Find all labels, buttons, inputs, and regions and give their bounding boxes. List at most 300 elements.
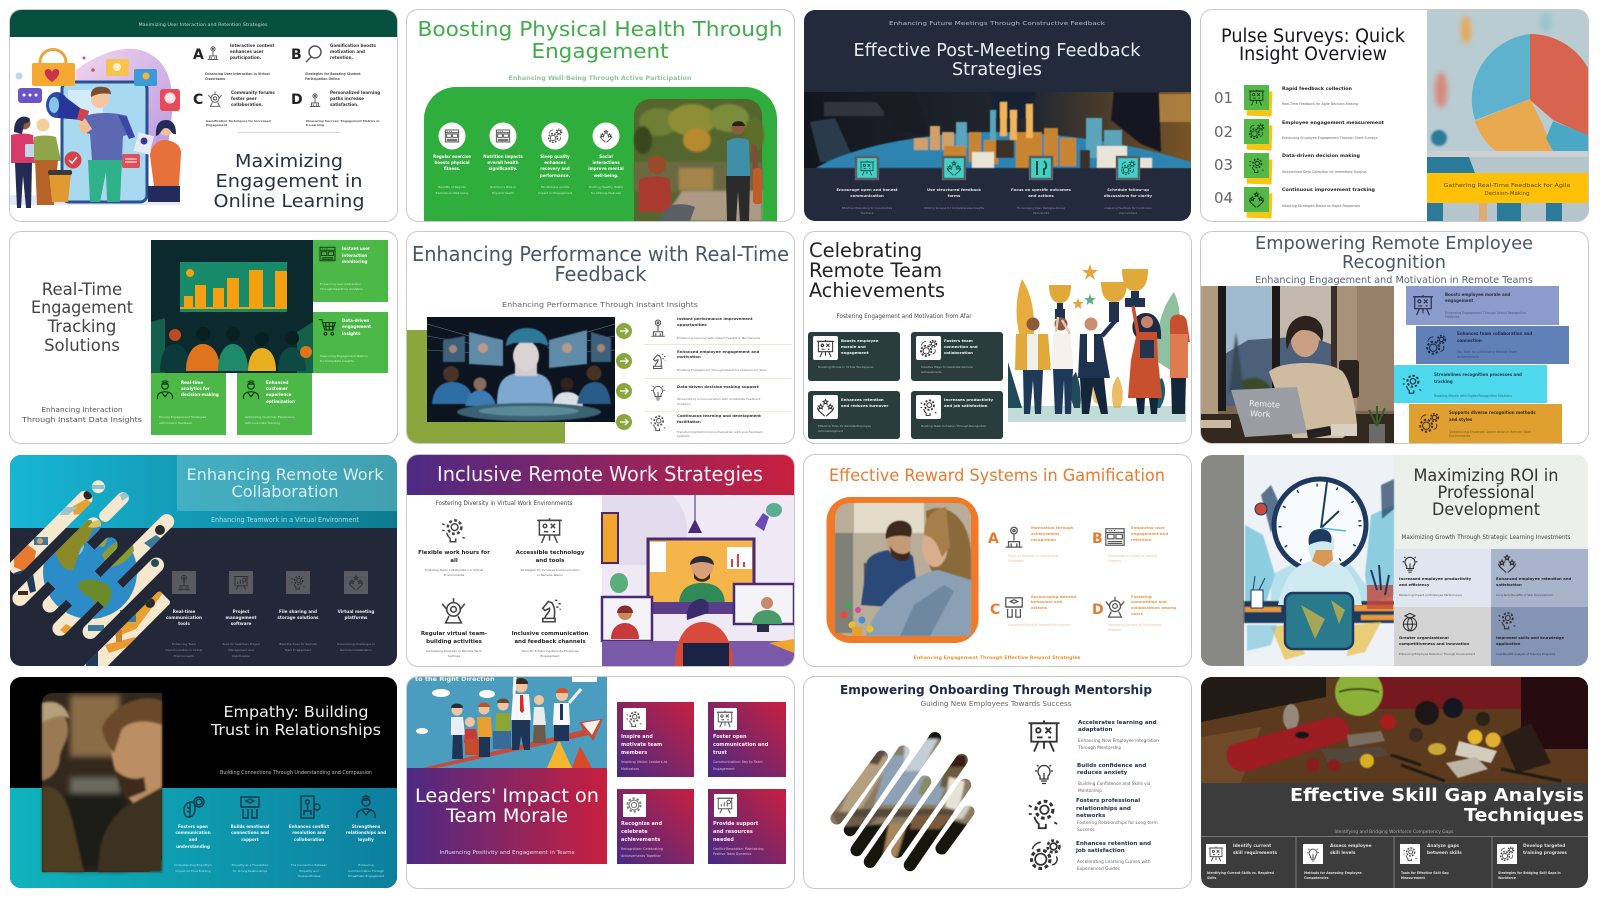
- item texts: relationships and: [346, 830, 386, 835]
- title: [31, 280, 134, 355]
- item texts: fitness.: [444, 166, 461, 171]
- feedback icon tiles: [856, 157, 1139, 179]
- title: Empathy: Building: [224, 703, 368, 721]
- tool labels: software: [231, 621, 252, 626]
- tool labels: platforms: [345, 615, 368, 620]
- title: Solutions: [44, 336, 120, 355]
- item A: recognition: [1031, 537, 1056, 542]
- title: Real-Time: [42, 280, 122, 299]
- tile: recognize: Achievements Together: [621, 854, 661, 858]
- card: Maximizing Engagement in Online Learning: [10, 10, 397, 221]
- step text: Rapid feedback collection: [1282, 86, 1352, 92]
- item captions: for Lifelong Wellness: [591, 191, 621, 195]
- tile captions: [1399, 593, 1556, 656]
- card: Celebrating Remote Team Achievements: [804, 232, 1191, 443]
- item C: C: [193, 92, 203, 108]
- title: [1221, 26, 1405, 65]
- item D: Measuring Success: Engagement Metrics in: [306, 119, 380, 123]
- item texts: Builds emotional: [231, 824, 270, 829]
- item A: A: [988, 531, 999, 547]
- item B: retention: [1131, 537, 1152, 542]
- item texts: Sleep quality: [540, 154, 570, 159]
- item captions: Building Confidence and Skills via: [1078, 781, 1151, 787]
- card: Real-Time Engagement Tracking Solutions: [10, 232, 397, 443]
- card: Pulse Surveys: Quick Insight Overview: [1201, 10, 1588, 221]
- tool labels: [166, 609, 374, 626]
- tool captions: Tools for Seamless Project: [221, 642, 261, 646]
- olive block: [407, 330, 565, 443]
- tile captions: Cost-Benefit Analysis of Training Programs: [1496, 652, 1556, 656]
- card captions: Acknowledgment: [818, 429, 844, 433]
- green box: customer experience: Optimizing Customer Experience: [245, 415, 295, 419]
- item texts: facilitation: [677, 419, 701, 424]
- title: [809, 239, 945, 302]
- green box: customer experience: with Live Data Tracking: [245, 421, 280, 425]
- card: Effective Reward Systems in Gamification: [804, 455, 1191, 666]
- subtitle: Fostering Diversity in Virtual Work Environments: [436, 500, 572, 507]
- item texts: relationships and: [1076, 806, 1131, 812]
- caption banner: [1427, 173, 1588, 203]
- column texts: [1233, 843, 1567, 856]
- item texts: Enhanced employee engagement and: [677, 349, 760, 354]
- item texts: resolution and: [292, 830, 326, 835]
- tile: recognize: [617, 789, 694, 864]
- item texts: overall health: [487, 160, 519, 165]
- icons row: [438, 122, 620, 150]
- green box: instant monitoring: Through Real-Time Analytics: [319, 287, 363, 291]
- tile: support: Conflict Resolution: Maintaining: [713, 847, 764, 851]
- item captions: Addressing Diversity in Remote Work: [426, 649, 482, 653]
- item texts: forms: [948, 193, 961, 198]
- title: [210, 703, 381, 739]
- item captions: [676, 336, 767, 438]
- item captions: Empathy as a Foundation: [232, 863, 269, 867]
- step captions: Real-Time Feedback for Agile Decision-Making: [1282, 102, 1358, 106]
- subtitle: Enhancing Engagement and Motivation in Remote Teams: [1255, 275, 1533, 286]
- item B: engagement and: [1131, 531, 1168, 536]
- item texts: Instant performance improvement: [677, 316, 753, 321]
- item B: retention.: [330, 55, 354, 60]
- item texts: boosts physical: [435, 160, 470, 165]
- title: Strategies: [952, 59, 1042, 80]
- item texts: Fosters professional: [1076, 798, 1140, 804]
- card captions: Building Team Cohesion Through Recognition: [921, 424, 987, 428]
- tool captions: Environments: [174, 654, 194, 658]
- tool tiles: [172, 571, 368, 594]
- card: Enhancing Remote Work Collaboration: [10, 455, 397, 666]
- column captions: Tools for Effective Skill Gap: [1401, 871, 1449, 875]
- tool labels: tools: [178, 621, 190, 626]
- item captions: Building Healthy Habits: [589, 185, 623, 189]
- benefit tiles: [1394, 549, 1588, 666]
- stepped box 1: Boosts employee morale and: [1445, 292, 1511, 297]
- item captions: Utilizing Surveys for Comprehensive Insights: [924, 206, 985, 210]
- tool captions: Communication in Virtual: [166, 648, 203, 652]
- title: Professional: [1438, 483, 1534, 502]
- arrow buttons: [616, 323, 632, 430]
- item texts: and tools: [536, 558, 565, 564]
- bottom caption: Enhancing Engagement Through Effective Reward Strategies: [914, 655, 1081, 661]
- item A: [988, 525, 1074, 563]
- column texts: skill requirements: [1233, 850, 1278, 856]
- item B: motivation and: [330, 49, 365, 54]
- tile: communication: Engagement: [713, 767, 735, 771]
- item texts: Social: [599, 154, 613, 159]
- item texts: building activities: [426, 639, 483, 645]
- green box: customer experience: Enhanced: [266, 380, 289, 385]
- title: [1255, 233, 1533, 273]
- stepped box 4: and styles: [1449, 417, 1473, 422]
- tile: support: [708, 789, 786, 864]
- card: Boosting Physical Health Through Engagement: [407, 10, 794, 221]
- column texts: training programs: [1523, 850, 1567, 856]
- item captions: Analyzing Feedback for Continuous: [1104, 206, 1152, 210]
- column captions: [1207, 871, 1561, 880]
- column texts: skill levels: [1330, 850, 1356, 856]
- dividers: [644, 344, 792, 412]
- tile texts: competitiveness and innovation: [1399, 641, 1470, 646]
- card: Inclusive Remote Work Strategies: [407, 455, 794, 666]
- card texts: collaboration: [944, 350, 973, 355]
- subtitle: Building Connections Through Understanding and Compassion: [220, 770, 372, 776]
- green box: customer experience: experience: [266, 392, 292, 397]
- card texts: engagement: [841, 350, 869, 355]
- item B: [291, 43, 376, 81]
- item captions: Through Mentorship: [1077, 745, 1121, 751]
- item A: A: [193, 47, 204, 63]
- item texts: Regular exercise: [433, 154, 471, 159]
- title: Maximizing ROI in: [1414, 466, 1558, 485]
- subtitle: [21, 405, 142, 424]
- title: Effective Post-Meeting Feedback: [854, 40, 1141, 61]
- item texts: enhances: [544, 160, 566, 165]
- step captions: Enhancing Employee Engagement Through Short Surveys: [1282, 136, 1378, 140]
- item captions: in Remote Teams: [537, 573, 563, 577]
- item captions: Systems: [677, 434, 690, 438]
- column icons: [1206, 844, 1517, 864]
- card texts: connection and: [944, 344, 978, 349]
- item texts: [175, 824, 386, 849]
- stepped box 3: Boosting Morale with Digital Recognition Solutions: [1434, 394, 1512, 398]
- tile: communication: communication and: [713, 742, 769, 748]
- title: Empowering Onboarding Through Mentorship: [840, 683, 1152, 697]
- title: Insight Overview: [1239, 44, 1387, 65]
- item texts: communication: [850, 193, 884, 198]
- tile: support: needed: [713, 837, 734, 843]
- item B: Enhancing user: [1131, 525, 1165, 530]
- item captions: Impact on Trust Building: [175, 869, 211, 873]
- item texts: Accelerates learning and: [1078, 720, 1157, 726]
- item texts: Strengthens: [352, 824, 381, 829]
- item captions: Effective Moderating for Constructive: [842, 206, 892, 210]
- item D: [291, 90, 380, 127]
- illustration: team with trophies: [1008, 264, 1190, 422]
- item B: [1092, 525, 1168, 563]
- green panel: [424, 87, 777, 221]
- item captions: Fostering Team Collaboration in Virtual: [425, 568, 483, 572]
- stepped box 3: tracking: [1434, 379, 1453, 384]
- tile: inspire: members: [621, 750, 647, 756]
- subtitle: Maximizing Growth Through Strategic Learning Investments: [1402, 534, 1570, 541]
- item captions: [842, 206, 1152, 215]
- item B: B: [1092, 531, 1103, 547]
- tile: inspire: Inspire and: [621, 734, 653, 740]
- column texts: between skills: [1427, 850, 1462, 856]
- item texts: Nutrition impacts: [483, 154, 523, 159]
- green box: data-driven insights: for Immediate Insights: [320, 359, 354, 363]
- stepped box 2: Top Tools for Celebrating Remote Team: [1456, 350, 1517, 354]
- item captions: Participants: [1033, 211, 1049, 215]
- stepped box 4: Streamlining Employee Appreciation in Remote Work: [1449, 430, 1531, 434]
- card captions: Effective Tools for Remote Employee: [818, 424, 871, 428]
- illustration: audience watching bar chart: [151, 240, 313, 373]
- item B: B: [291, 47, 302, 63]
- subtitle: Enhancing Well-Being Through Active Participation: [508, 74, 692, 82]
- stepped box 1: engagement: [1445, 298, 1473, 303]
- item D: competition and: [1131, 599, 1167, 604]
- item A: Strategies: [1008, 559, 1024, 563]
- item A: achievement: [1031, 531, 1059, 536]
- item B: Systems: [1108, 559, 1122, 563]
- tile texts: Greater organizational: [1399, 635, 1449, 640]
- item C: Designing Effective Reward Mechanisms: [1008, 623, 1071, 627]
- item texts: loyalty: [358, 837, 374, 842]
- icons: [650, 320, 666, 430]
- title: Tracking: [47, 317, 116, 336]
- title: Pulse Surveys: Quick: [1221, 26, 1405, 47]
- green box: customer experience: customer: [266, 386, 288, 391]
- side strip: [1201, 455, 1244, 666]
- green box: instant monitoring: interaction: [342, 253, 367, 258]
- tool captions: Enhancing Team: [172, 642, 196, 646]
- item captions: Encouraging Open Dialogue Among: [1017, 206, 1065, 210]
- step numbers: [1214, 89, 1233, 207]
- card texts: Enhances retention: [841, 397, 884, 402]
- green box: analytics: Driving Engagement Strategies: [159, 415, 207, 419]
- column captions: Skills: [1207, 876, 1216, 880]
- column lines: [1201, 836, 1588, 888]
- item captions: Communication Through: [348, 869, 384, 873]
- subtitle: Enhancing Performance Through Instant Insights: [502, 300, 698, 309]
- card texts: and reduces turnover: [841, 403, 888, 408]
- subtitle: Fostering Engagement and Motivation from Afar: [836, 312, 972, 320]
- tool labels: File sharing and: [279, 609, 317, 614]
- item captions: Impact on Engagement: [538, 191, 573, 195]
- title: [418, 17, 782, 63]
- item captions: Enhancing: [358, 863, 374, 867]
- green box: analytics: with Instant Feedback: [159, 421, 192, 425]
- header band: [10, 10, 397, 37]
- item captions: Transforming Performance Evaluation with Live Feedback: [676, 430, 763, 434]
- tool labels: Real-time: [173, 609, 196, 614]
- item texts: recovery and: [540, 166, 570, 171]
- stepped box 2: Enhances team collaboration and: [1457, 331, 1532, 336]
- tile captions: Enhancing Employee Retention Through Development: [1399, 652, 1476, 656]
- card: Effective Skill Gap Analysis Techniques: [1201, 677, 1588, 888]
- item texts: Continuous learning and development: [677, 413, 761, 418]
- item captions: Mindfulness and Its: [541, 185, 569, 189]
- item texts: [677, 316, 761, 424]
- card texts: morale and: [841, 344, 866, 349]
- tile: support: and resources: [713, 829, 753, 835]
- green box: instant monitoring: monitoring: [342, 259, 368, 264]
- item B: Psychological Impact of Reward: [1108, 554, 1157, 558]
- green box: analytics: analytics for: [181, 386, 210, 391]
- step text: Data-driven decision making: [1282, 153, 1360, 159]
- title: Engagement in: [216, 172, 362, 192]
- item texts: opportunities: [677, 322, 707, 327]
- item texts: Inclusive communication: [512, 631, 588, 637]
- subtitle: Identifying and Bridging Workforce Competency Gaps: [1334, 829, 1454, 835]
- icons: [184, 796, 375, 818]
- item captions: Strategies for Inclusive Communication: [520, 568, 580, 572]
- tool captions: Best Practices for Remote: [279, 642, 317, 646]
- green box: analytics: Real-time: [181, 380, 203, 385]
- item texts: all: [450, 558, 458, 564]
- title: Trust in Relationships: [210, 721, 381, 739]
- title: [1290, 785, 1584, 826]
- tile: support: Provide support: [713, 821, 759, 827]
- item texts: significantly.: [489, 166, 518, 171]
- title: Techniques: [1464, 805, 1584, 826]
- tile: communication: Communication: Key to Team: [713, 760, 763, 764]
- title: Boosting Physical Health Through: [418, 17, 782, 41]
- item texts: and actions: [1028, 193, 1054, 198]
- illustration: people with megaphone and phone: [10, 49, 181, 208]
- item texts: Data-driven decision-making support: [677, 384, 759, 389]
- item C: Community forums: [231, 90, 275, 95]
- item A: Motivation through: [1031, 525, 1074, 530]
- photo strips: [830, 732, 975, 872]
- card: Empowering Remote Employee Recognition: [1201, 232, 1588, 443]
- stepped box 4: Environments: [1449, 434, 1471, 438]
- title block: [407, 768, 607, 864]
- tool captions: Management and: [228, 648, 254, 652]
- item captions: Streamlining Communication with Immediate Feedback: [677, 397, 761, 401]
- title: [1414, 466, 1558, 519]
- illustration: video meeting: [602, 495, 794, 666]
- tool labels: storage solutions: [277, 615, 319, 620]
- title: Collaboration: [232, 482, 338, 501]
- card icons: [813, 336, 941, 419]
- green box: instant monitoring: Enhancing User Interaction: [320, 282, 361, 286]
- item texts: improve mental: [588, 166, 624, 171]
- photo frame: students at board: [826, 497, 978, 643]
- item captions: Environments: [444, 573, 465, 577]
- item captions: Boosting Engagement Through Real-Time Assessment Tools: [677, 368, 767, 372]
- item C: collaboration.: [231, 102, 263, 107]
- card: Maximizing ROI in Professional Development: [1201, 455, 1588, 666]
- step captions: Adapting Strategies Based on Rapid Responses: [1282, 204, 1360, 208]
- card texts: and job satisfaction: [944, 403, 988, 408]
- photo: two men talking: [42, 693, 162, 872]
- title: [854, 40, 1141, 80]
- item captions: [436, 185, 623, 195]
- title: Online Learning: [214, 192, 364, 212]
- column captions: Identifying Current Skills vs. Required: [1207, 871, 1274, 875]
- stepped box 2: Achievements: [1457, 355, 1479, 359]
- item A: Interactive content: [230, 43, 274, 48]
- item C: actions: [1031, 605, 1048, 610]
- item D: satisfaction.: [330, 102, 359, 107]
- item D: Rewards: [1108, 628, 1122, 632]
- tool labels: communication: [166, 615, 202, 620]
- item captions: Feedback: [861, 211, 874, 215]
- tool captions: [166, 642, 375, 658]
- item texts: understanding: [176, 844, 210, 849]
- subtitle: Enhancing Interaction: [41, 405, 123, 414]
- caption banner: Gathering Real-Time Feedback for Agile: [1444, 183, 1571, 189]
- item captions: Understanding Empathy's: [174, 863, 212, 867]
- title: Effective Skill Gap Analysis: [1290, 785, 1584, 806]
- item texts: Encourage open and honest: [836, 187, 898, 192]
- item captions: Settings: [448, 654, 461, 658]
- item texts: and feedback channels: [514, 639, 586, 645]
- title: Recognition: [1342, 252, 1446, 273]
- item texts: networks: [1076, 813, 1106, 819]
- green box: data-driven insights: engagement: [342, 324, 371, 329]
- photo: woman at laptop: Remote: [1249, 399, 1280, 410]
- caption banner: Decision-Making: [1484, 191, 1530, 197]
- card captions: Boosting Morale in Virtual Workspaces: [818, 365, 874, 369]
- tool captions: Overcoming Challenges in: [337, 642, 375, 646]
- green box: analytics: decision-making: [181, 392, 219, 397]
- title: Celebrating: [809, 239, 922, 262]
- item captions: Empathy and: [299, 869, 319, 873]
- item texts: and: [189, 837, 197, 842]
- tile: communication: [708, 702, 786, 777]
- column captions: Measurement: [1401, 876, 1425, 880]
- dark cards: [808, 332, 1003, 439]
- item texts: job satisfaction: [1075, 848, 1125, 854]
- item captions: Mentorship: [1078, 788, 1102, 794]
- column texts: Assess employee: [1330, 843, 1372, 849]
- item A: participation.: [230, 55, 262, 60]
- item C: Gamification Techniques for Increased: [206, 119, 271, 123]
- title: Remote Team: [809, 259, 942, 282]
- item texts: Regular virtual team-: [421, 631, 487, 637]
- card: Empowering Onboarding Through Mentorship: [804, 677, 1191, 888]
- title: [186, 465, 384, 501]
- stepped box 2: [1416, 326, 1569, 364]
- photo: meeting table with city model: [804, 92, 1191, 168]
- card texts: [841, 338, 993, 408]
- item D: Fostering: [1131, 594, 1152, 599]
- item texts: [1075, 720, 1157, 854]
- item captions: Experienced Guides: [1077, 866, 1121, 872]
- item B: Gamification boosts: [330, 43, 376, 48]
- item D: collaboration among: [1131, 605, 1176, 610]
- green box: customer experience: [237, 373, 312, 435]
- icons: [1028, 720, 1060, 868]
- item D: Measuring Success of Gamification: [1108, 623, 1162, 627]
- item C: foster peer: [231, 96, 257, 101]
- item A: Types of Rewards in Gamification: [1007, 554, 1059, 558]
- title: Effective Reward Systems in Gamification: [829, 466, 1165, 486]
- tile icons: [860, 161, 1135, 175]
- tile: inspire: Inspiring Vision: Leaders as: [621, 760, 668, 764]
- stepped box 1: [1406, 286, 1559, 325]
- photo: team around holographic table: [427, 317, 615, 422]
- photo: woman at laptop: [1201, 286, 1394, 443]
- card texts: Increases productivity: [944, 397, 993, 402]
- tile: inspire: motivate team: [621, 742, 662, 748]
- card texts: Boosts employee: [841, 338, 879, 343]
- item texts: well-being.: [594, 173, 619, 178]
- stepped box 4: Supports diverse recognition methods: [1449, 410, 1536, 415]
- item captions: [174, 863, 385, 878]
- item captions: Improvement: [1119, 211, 1137, 215]
